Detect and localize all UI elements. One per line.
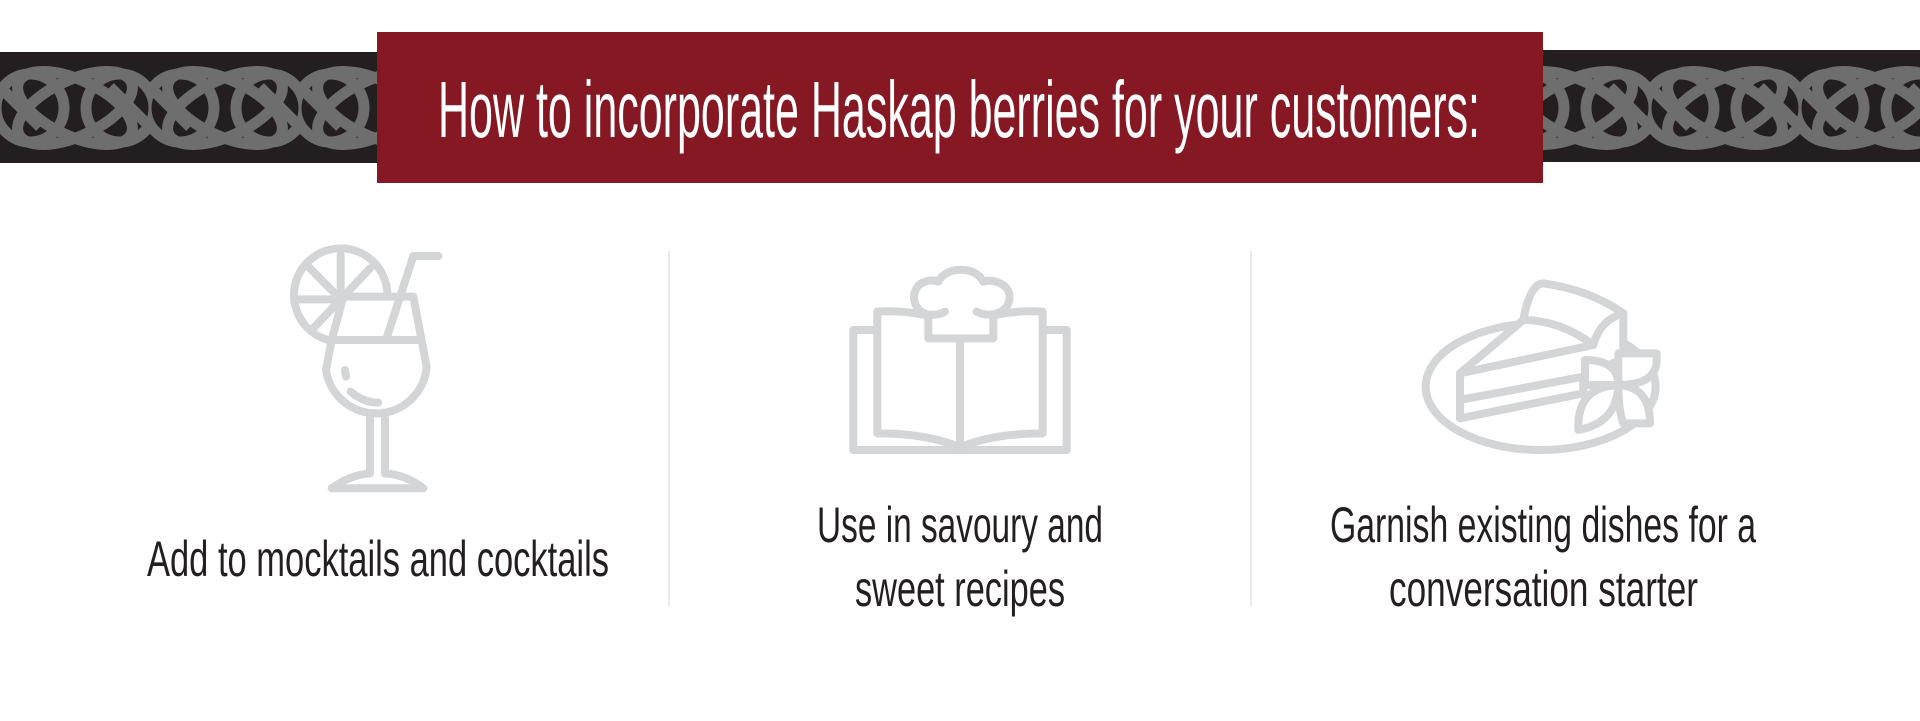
text: garnish: conversation starter — [1389, 561, 1698, 617]
text: garnish — [1330, 497, 1756, 617]
decorative band right — [1540, 50, 1920, 162]
text: recipes — [817, 497, 1103, 617]
icon: cocktail — [294, 248, 438, 488]
text: recipes: Use in savoury and — [817, 497, 1103, 553]
icon: pie slice on plate — [1426, 283, 1657, 450]
text: recipes: sweet recipes — [855, 561, 1065, 617]
title banner — [377, 32, 1543, 183]
decorative band left — [0, 52, 380, 163]
text: cocktails: Add to mocktails and cocktails — [147, 531, 609, 587]
icon: recipe book — [853, 270, 1067, 450]
